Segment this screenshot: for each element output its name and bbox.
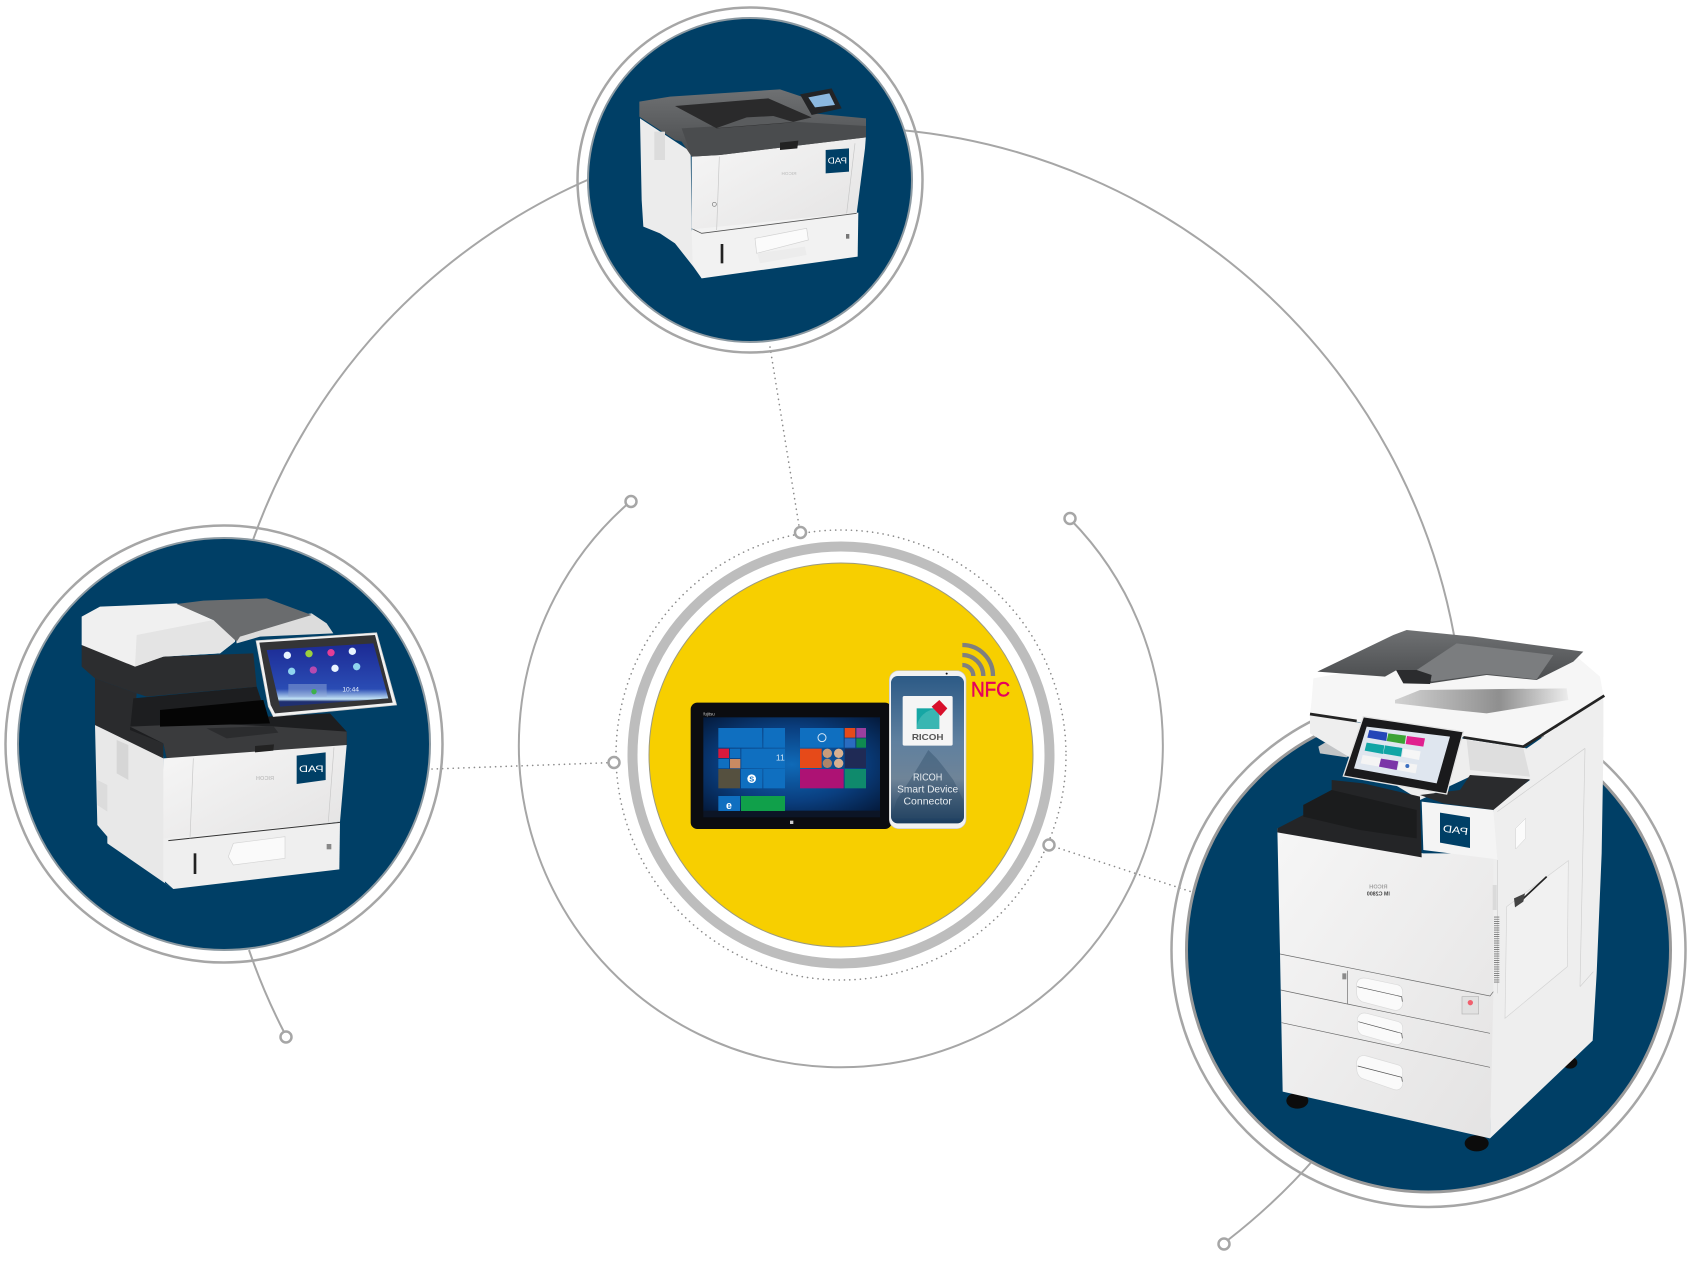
- touch panel: 10:44: [342, 687, 359, 694]
- touch panel: [256, 633, 397, 717]
- printer: desktop laser printer: PAD: [827, 156, 847, 165]
- dotted link: top printer to hub: [770, 347, 800, 532]
- phone: Connector: [903, 797, 953, 808]
- right printer circle: [1172, 630, 1686, 1207]
- node: hub left: [608, 757, 620, 768]
- hub devices: tablet, phone and NFC: [691, 645, 1010, 829]
- printer: floor-standing colour multifunction device: IM C2800: [1367, 892, 1390, 898]
- connector: right printer tail with node: [1218, 1157, 1316, 1250]
- connector: top-right arc: [900, 130, 1454, 635]
- phone: [889, 671, 966, 829]
- dotted link: right printer to hub: [1049, 845, 1195, 893]
- printer: compact multifunction device: [82, 598, 397, 889]
- connector: left printer tail with node: [249, 950, 292, 1042]
- phone: Smart Device: [897, 785, 958, 796]
- printer: desktop laser printer: [639, 88, 866, 278]
- tablet: S: [749, 774, 754, 783]
- tablet: 11: [776, 753, 785, 763]
- top printer circle: [578, 8, 922, 352]
- inner orbit arc with end nodes: [519, 496, 1163, 1067]
- printer: floor-standing colour multifunction device: RICOH: [1369, 885, 1387, 891]
- printer: floor-standing colour multifunction device: PAD: [1442, 824, 1469, 838]
- tablet: [691, 703, 892, 829]
- side vents: [1489, 917, 1505, 983]
- printer: desktop laser printer: RICOH: [781, 171, 797, 176]
- printer: compact multifunction device: PAD: [299, 764, 324, 774]
- phone: RICOH: [913, 773, 942, 784]
- left printer circle: [6, 526, 442, 962]
- touch panel: [1343, 717, 1463, 794]
- node: hub right: [1044, 840, 1054, 850]
- phone: RICOH: [912, 732, 943, 742]
- hub: central yellow circle: [632, 546, 1050, 964]
- tablet: e: [726, 800, 732, 812]
- NFC label: NFC: [971, 679, 1010, 702]
- tablet: fujitsu: [703, 711, 715, 716]
- dotted ring around hub: [616, 530, 1066, 980]
- dotted link: left printer to hub: [432, 762, 614, 769]
- NFC signal icon: [962, 645, 993, 676]
- node: hub top: [795, 527, 806, 538]
- paper trays: [1280, 954, 1493, 1067]
- connector: top-left arc: [253, 178, 592, 540]
- printer: floor-standing colour multifunction device: [1277, 630, 1604, 1151]
- printer: compact multifunction device: RICOH: [256, 776, 274, 782]
